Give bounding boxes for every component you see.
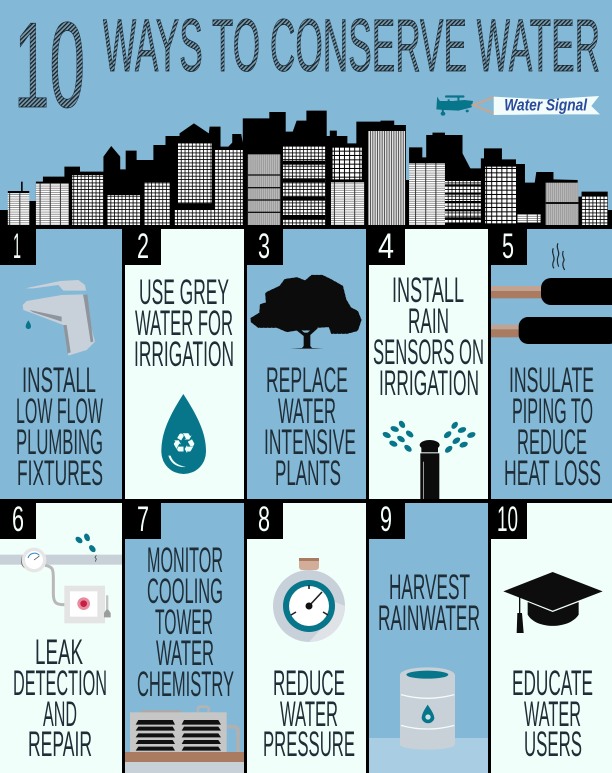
icon: recycle drop: ♻ <box>171 427 197 460</box>
panel 2: grey water: IRRIGATION <box>134 335 234 374</box>
number 7 <box>125 500 161 539</box>
number 8 <box>247 500 283 539</box>
number 1 <box>0 227 36 266</box>
panel 5: insulate piping <box>491 227 612 499</box>
number 2: 2 <box>137 227 149 266</box>
number 2 <box>125 227 161 266</box>
icon: biplane <box>436 95 473 116</box>
number 9: 9 <box>380 500 392 539</box>
city skyline <box>0 111 612 230</box>
panel 7: cooling tower: CHEMISTRY <box>137 665 234 704</box>
label: WATER <box>280 695 338 734</box>
banner ropes <box>473 97 494 113</box>
panel 6: leak detection <box>0 500 122 773</box>
label: RAIN <box>408 302 449 341</box>
label <box>512 664 593 764</box>
panel 10: educate users <box>491 500 612 773</box>
label <box>137 541 234 704</box>
number 3: 3 <box>258 227 270 266</box>
number 3 <box>247 227 283 266</box>
title: number 10: 10 <box>14 0 85 133</box>
label: PLANTS <box>275 454 341 493</box>
panel 2: grey water <box>125 227 244 499</box>
label <box>13 633 107 764</box>
number 7: 7 <box>137 500 149 539</box>
panel 9: harvest rainwater <box>369 500 488 773</box>
panel 1: low flow fixtures <box>0 227 122 499</box>
label <box>134 273 234 374</box>
panel 8: reduce pressure <box>247 500 366 773</box>
panel 3: replace plants: INTENSIVE <box>264 423 356 462</box>
number 9 <box>369 500 405 539</box>
top black band <box>0 225 612 229</box>
number 4 <box>369 227 405 266</box>
number 10: 10 <box>497 500 518 539</box>
label: INSTALL <box>22 361 96 400</box>
label <box>263 664 355 764</box>
number 6: 6 <box>12 500 24 539</box>
label <box>16 361 103 493</box>
label <box>378 568 480 638</box>
label: IRRIGATION <box>379 364 479 403</box>
label: TOWER <box>155 603 213 642</box>
panel 1: low flow fixtures: FIXTURES <box>17 454 103 493</box>
icon: cooling tower unit <box>125 707 244 773</box>
label: WATER <box>156 634 214 673</box>
icon: rain barrel <box>400 667 455 750</box>
icon: sprinkler <box>382 420 476 499</box>
text: SENSORS ON <box>373 333 484 372</box>
label <box>264 361 356 493</box>
panel 8: reduce pressure: PRESSURE <box>263 725 355 764</box>
label: REDUCE <box>273 664 345 703</box>
panel 1: low flow fixtures: PLUMBING <box>16 423 103 462</box>
number 4: 4 <box>378 227 394 266</box>
number 5: 5 <box>502 227 514 266</box>
label: COOLING <box>147 572 223 611</box>
label: HARVEST <box>389 568 470 607</box>
column dividers <box>122 229 491 773</box>
label: WATER <box>278 392 336 431</box>
label: AND <box>43 695 77 734</box>
label: REPAIR <box>28 725 92 764</box>
icon: pressure gauge <box>273 558 345 642</box>
label: USE GREY <box>139 273 229 312</box>
panel 7: cooling tower <box>125 500 244 773</box>
number 8: 8 <box>258 500 270 539</box>
panel 1: low flow fixtures: LOW FLOW <box>16 392 103 431</box>
panel 4: rain sensors <box>369 227 488 499</box>
panel 6: leak detection: DETECTION <box>13 664 107 703</box>
panel 9: harvest rainwater: RAINWATER <box>378 599 480 638</box>
number 6 <box>0 500 36 539</box>
icon: insulated pipes <box>491 243 612 344</box>
number 1: 1 <box>13 227 21 266</box>
label: INSTALL <box>392 271 464 310</box>
panel 2: grey water: WATER FOR <box>135 304 233 343</box>
airplane with banner <box>436 95 600 116</box>
banner <box>494 96 600 115</box>
icon: recycle drop <box>161 394 206 474</box>
panel 3: replace plants <box>247 227 366 499</box>
label <box>504 361 601 493</box>
label <box>373 271 484 403</box>
icon: faucet <box>23 280 95 356</box>
middle black band <box>0 499 612 503</box>
icon: graduation cap <box>503 572 603 633</box>
icon: leak detector <box>0 533 122 623</box>
label: LEAK <box>35 633 83 672</box>
label: REPLACE <box>266 361 348 400</box>
label: MONITOR <box>147 541 223 580</box>
number 5 <box>491 227 527 266</box>
icon: tree <box>252 276 360 349</box>
number 10 <box>491 500 527 539</box>
